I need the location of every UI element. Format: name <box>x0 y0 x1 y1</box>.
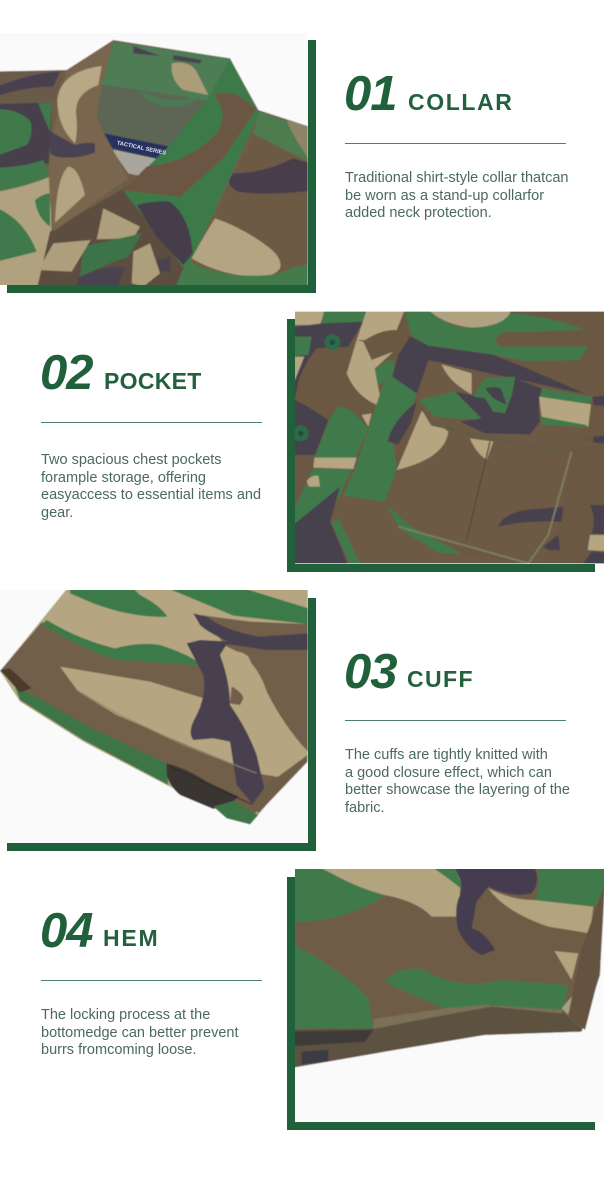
right placket <box>568 883 604 1030</box>
buttons <box>324 334 340 350</box>
photo: camouflage hem <box>295 869 604 1068</box>
text: pocket description: gear. <box>41 504 73 520</box>
panel: collar photo with frame <box>0 39 316 293</box>
shoulder panel <box>253 112 308 162</box>
text: collar description: added neck protection. <box>345 205 492 221</box>
green under fold <box>15 687 168 785</box>
purple shape <box>186 613 308 804</box>
stitches <box>77 690 257 773</box>
text: hem description <box>41 1007 238 1058</box>
photo: camouflage shirt collar <box>0 39 308 285</box>
text: cuff description <box>345 747 570 816</box>
heading: 04 hem: HEM <box>103 925 160 951</box>
heading: 02 pocket: 02 <box>40 346 93 400</box>
back collar <box>102 42 232 101</box>
panel: pocket photo with frame <box>287 312 604 572</box>
below collar <box>37 187 187 290</box>
frame <box>7 40 316 293</box>
pocket body <box>385 408 602 563</box>
green stripe <box>42 620 204 666</box>
left placket <box>295 312 324 326</box>
heading: 03 cuff: 03 <box>344 645 397 699</box>
label text: TACTICAL SERIES <box>116 140 167 157</box>
text: cuff description: better showcase the layering of the <box>345 782 570 798</box>
heading: 02 pocket: POCKET <box>104 368 202 394</box>
text: hem description: The locking process at the <box>41 1007 210 1023</box>
text: hem description: burrs fromcoming loose. <box>41 1042 197 1058</box>
heading: 01 collar: COLLAR <box>408 89 513 115</box>
photo: camouflage cuff <box>0 590 308 826</box>
text: pocket description <box>41 452 261 520</box>
right collar flap <box>123 58 259 272</box>
top green <box>70 590 168 618</box>
text: pocket description: easyaccess to essential items and <box>41 487 261 503</box>
text: cuff description: The cuffs are tightly knitted with <box>345 747 548 763</box>
frame <box>7 598 316 851</box>
frame <box>287 319 595 572</box>
brown band <box>0 622 287 815</box>
panel: hem photo with frame <box>287 869 604 1130</box>
tan strip next to placket <box>356 312 405 341</box>
panel: cuff photo with frame <box>0 590 316 851</box>
label <box>104 133 170 159</box>
heading: 03 cuff: CUFF <box>407 666 474 692</box>
text: collar description: Traditional shirt-style collar thatcan <box>345 170 568 186</box>
cuff end <box>252 755 308 813</box>
pocket flap <box>422 360 592 427</box>
text: hem description: bottomedge can better prevent <box>41 1024 238 1040</box>
mesh <box>97 85 207 147</box>
text: collar description <box>345 170 568 221</box>
bottom-left flap brown <box>332 495 384 564</box>
text: collar description: be worn as a stand-up collarfor <box>345 188 544 204</box>
upper green stripes <box>405 312 588 362</box>
green button band <box>343 377 416 502</box>
folded hem <box>285 1005 582 1069</box>
heading: 01 collar <box>344 67 513 121</box>
purple strip <box>392 337 598 400</box>
heading: 04 hem: 04 <box>40 904 93 958</box>
text: cuff description: fabric. <box>345 800 384 816</box>
left collar flap <box>49 41 128 232</box>
heading: 02 pocket <box>40 346 202 400</box>
heading: 01 collar: 01 <box>344 67 397 121</box>
text: pocket description: Two spacious chest pockets <box>41 452 222 468</box>
heading: 04 hem <box>40 904 160 958</box>
text: pocket description: forample storage, offering <box>41 470 206 486</box>
left front of shirt <box>5 72 12 73</box>
frame <box>287 877 595 1130</box>
tan lobe under purple <box>238 651 306 750</box>
text: cuff description: a good closure effect, which can <box>345 764 552 780</box>
garment silhouette <box>0 590 308 816</box>
heading: 03 cuff <box>344 645 474 699</box>
photo: camouflage chest pocket <box>295 312 604 564</box>
right side shapes <box>590 505 604 535</box>
right brown <box>201 615 308 752</box>
